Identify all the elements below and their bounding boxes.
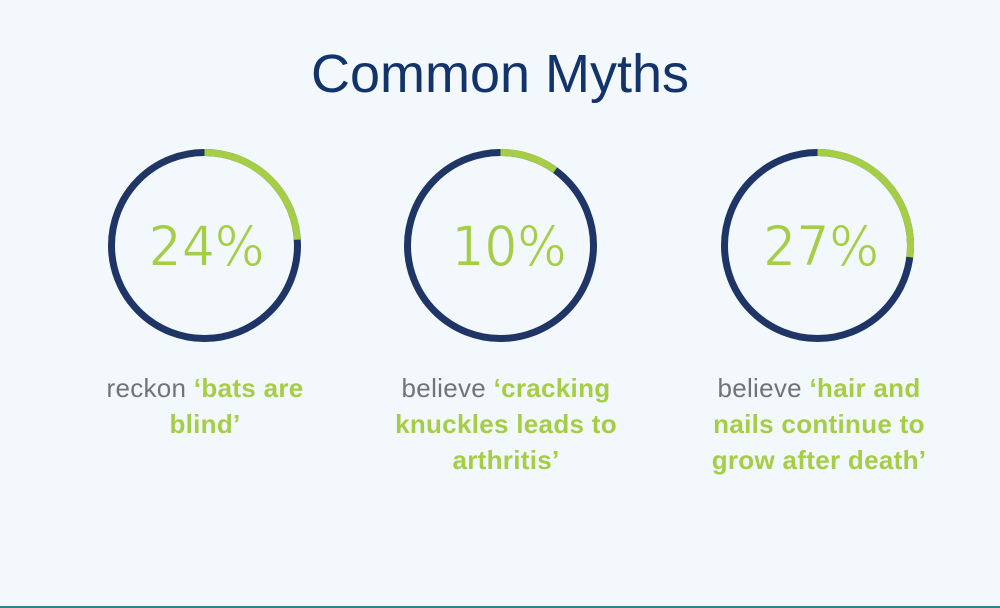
caption: knuckles: [395, 373, 617, 475]
caption: knuckles: believe ‘cracking: [402, 373, 610, 403]
caption: bats: [106, 373, 304, 439]
caption: hair and nails: believe ‘hair and: [717, 373, 921, 403]
chart: 10%: 10%: [452, 214, 566, 278]
chart: 24%: [112, 152, 298, 338]
chart: 27%: 27%: [763, 214, 879, 278]
title: Common Myths: [311, 44, 689, 104]
chart: 24%: 24%: [148, 214, 264, 278]
caption: bats: blind’: [169, 409, 241, 439]
caption: hair and nails: [712, 373, 926, 475]
caption: hair and nails: nails continue to: [713, 409, 925, 439]
caption: hair and nails: grow after death’: [712, 445, 926, 475]
chart: 10%: [408, 152, 594, 338]
caption: knuckles: knuckles leads to: [395, 409, 617, 439]
chart: 27%: [724, 152, 911, 338]
caption: bats: reckon ‘bats are: [106, 373, 304, 403]
footer line: [0, 606, 1000, 608]
caption: knuckles: arthritis’: [452, 445, 560, 475]
